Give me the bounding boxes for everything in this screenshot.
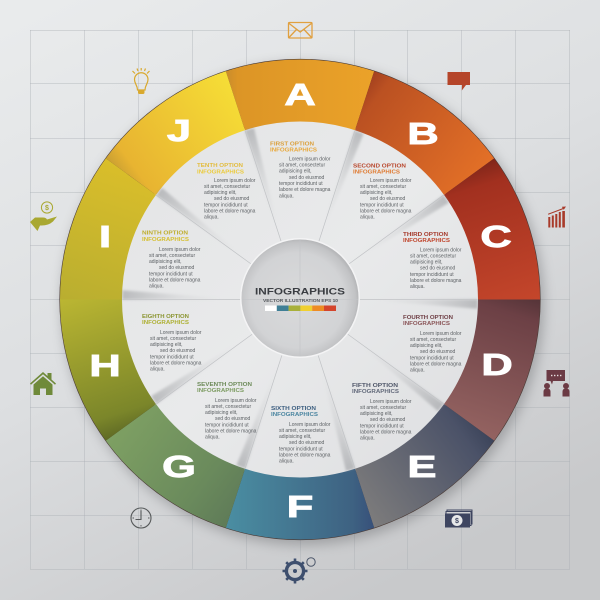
icon: speech bubble [448, 72, 470, 90]
text block: tenth option: Lorem ipsum dolor [214, 178, 256, 184]
text block: eighth option: adipisicing elit, [150, 342, 183, 348]
letter H: H [89, 348, 121, 383]
text block: eighth option: EIGHTH OPTION [142, 314, 189, 320]
text block: third option: aliqua. [410, 284, 425, 290]
text block: seventh option: labore et dolore magna [205, 429, 257, 435]
text block: sixth option: sed do eiusmod [289, 440, 325, 446]
text block: third option: Lorem ipsum dolor [420, 247, 462, 253]
text block: second option: tempor incididunt ut [360, 202, 404, 208]
text block: fifth option: adipisicing elit, [360, 411, 393, 417]
inner disc [120, 120, 480, 480]
text block: third option: tempor incididunt ut [410, 272, 454, 278]
title text: INFOGRAPHICS [255, 286, 346, 298]
text block: tenth option: aliqua. [204, 215, 219, 221]
segment J [99, 62, 260, 206]
text block: sixth option [271, 406, 331, 465]
text block: eighth option: INFOGRAPHICS [142, 320, 190, 326]
text block: seventh option [197, 382, 257, 441]
text block: tenth option: INFOGRAPHICS [197, 169, 245, 175]
text block: ninth option: tempor incididunt ut [149, 271, 193, 277]
segment H [49, 281, 162, 444]
text block: ninth option: INFOGRAPHICS [142, 237, 190, 243]
letter A: A [284, 77, 316, 112]
text block: third option: INFOGRAPHICS [403, 238, 451, 244]
text block: eighth option [142, 314, 202, 373]
text block: fourth option: tempor incididunt ut [410, 355, 454, 361]
text block: first option: tempor incididunt ut [279, 181, 323, 187]
letter G: G [162, 449, 196, 484]
icon: clock [131, 508, 151, 528]
segment I [49, 155, 162, 318]
text block: ninth option: sed do eiusmod [159, 265, 195, 271]
segment C [438, 155, 551, 318]
icon: light bulb [132, 68, 150, 94]
text block: fourth option: adipisicing elit, [410, 343, 443, 349]
segment D [438, 281, 551, 444]
text block: second option: INFOGRAPHICS [353, 170, 401, 176]
text block: fifth option [352, 383, 412, 442]
segment A [226, 60, 374, 130]
text block: eighth option: tempor incididunt ut [150, 354, 194, 360]
text block: ninth option: NINTH OPTION [142, 231, 188, 237]
icon: two people talking [544, 370, 570, 396]
text block: sixth option: tempor incididunt ut [279, 446, 323, 452]
text block: ninth option: Lorem ipsum dolor [159, 247, 201, 253]
text block: eighth option: sed do eiusmod [160, 348, 196, 354]
letter E: E [408, 449, 436, 484]
text block: eighth option: Lorem ipsum dolor [160, 330, 202, 336]
text block: seventh option: sit amet, consectetur [205, 404, 251, 410]
text block: third option [403, 232, 462, 290]
text block: sixth option: aliqua. [279, 459, 294, 465]
icon: envelope [288, 22, 312, 38]
text block: fourth option: aliqua. [410, 368, 425, 374]
icon: hand with coin: $ [45, 205, 49, 212]
text block: second option: adipisicing elit, [360, 190, 393, 196]
text block: second option: labore et dolore magna [360, 209, 412, 215]
text block: sixth option: labore et dolore magna [279, 453, 331, 459]
text block: ninth option: labore et dolore magna [149, 278, 201, 284]
text block: first option: INFOGRAPHICS [270, 148, 318, 154]
text block: fifth option: INFOGRAPHICS [352, 389, 400, 395]
text block: first option: sit amet, consectetur [279, 163, 325, 169]
letter F: F [287, 489, 313, 524]
text block: second option: sit amet, consectetur [360, 184, 406, 190]
text block: first option: labore et dolore magna [279, 187, 331, 193]
letter J: J [167, 113, 191, 148]
text block: eighth option: labore et dolore magna [150, 361, 202, 367]
text block: sixth option: SIXTH OPTION [271, 406, 316, 412]
text block: fourth option [403, 315, 462, 374]
text block: second option: sed do eiusmod [370, 196, 406, 202]
icon: hand with coin [30, 202, 57, 231]
text block: fifth option: aliqua. [360, 436, 375, 442]
text block: third option: THIRD OPTION [403, 232, 448, 238]
text block: seventh option: aliqua. [205, 435, 220, 441]
text block: ninth option [142, 231, 201, 290]
text block: second option: SECOND OPTION [353, 164, 406, 170]
text block: third option: sit amet, consectetur [410, 253, 456, 259]
text block: second option: aliqua. [360, 215, 375, 221]
segment letters [89, 77, 513, 524]
icon: bar chart with arrow [548, 206, 566, 228]
text block: fourth option: sit amet, consectetur [410, 337, 456, 343]
icon: banknotes [445, 510, 472, 528]
segment G [99, 393, 260, 537]
text block: third option: sed do eiusmod [420, 266, 456, 272]
center circle title [240, 238, 360, 358]
segment B [340, 62, 501, 206]
text block: second option [353, 164, 412, 221]
text block: fifth option: sit amet, consectetur [360, 405, 406, 411]
text block: seventh option: SEVENTH OPTION [197, 382, 252, 388]
segment E [340, 393, 501, 537]
text block: sixth option: adipisicing elit, [279, 434, 312, 440]
text block: first option: sed do eiusmod [289, 175, 325, 181]
text block: first option: Lorem ipsum dolor [289, 156, 331, 162]
text block: fourth option: INFOGRAPHICS [403, 321, 451, 327]
text block: tenth option: sed do eiusmod [214, 196, 250, 202]
icon: banknotes: $ [455, 518, 459, 525]
text block: first option [270, 142, 331, 199]
segment F [226, 469, 374, 539]
text block: fifth option: tempor incididunt ut [360, 423, 404, 429]
text block: fourth option: FOURTH OPTION [403, 315, 453, 321]
text block: tenth option [197, 163, 256, 221]
text block: fourth option: sed do eiusmod [420, 349, 456, 355]
text block: first option: FIRST OPTION [270, 142, 314, 148]
text block: first option: aliqua. [279, 193, 294, 199]
text block: tenth option: labore et dolore magna [204, 209, 256, 215]
text block: fifth option: sed do eiusmod [370, 417, 406, 423]
text block: seventh option: adipisicing elit, [205, 410, 238, 416]
text block: ninth option: aliqua. [149, 284, 164, 290]
text block: ninth option: sit amet, consectetur [149, 253, 195, 259]
wheel [49, 59, 551, 545]
text block: tenth option: TENTH OPTION [197, 163, 243, 169]
text block: seventh option: tempor incididunt ut [205, 422, 249, 428]
text block: fourth option: Lorem ipsum dolor [420, 331, 462, 337]
letter B: B [407, 116, 439, 151]
text block: sixth option: sit amet, consectetur [279, 428, 325, 434]
text block: fifth option: FIFTH OPTION [352, 383, 398, 389]
text block: sixth option: INFOGRAPHICS [271, 412, 319, 418]
letter C: C [480, 219, 512, 254]
text block: seventh option: INFOGRAPHICS [197, 388, 245, 394]
text block: tenth option: sit amet, consectetur [204, 184, 250, 190]
text block: seventh option: sed do eiusmod [215, 416, 251, 422]
text block: fifth option: Lorem ipsum dolor [370, 399, 412, 405]
text block: fourth option: labore et dolore magna [410, 362, 462, 368]
icon: house [30, 372, 56, 395]
text block: third option: labore et dolore magna [410, 278, 462, 284]
text block: seventh option: Lorem ipsum dolor [215, 398, 257, 404]
colour bar [265, 306, 336, 311]
text block: ninth option: adipisicing elit, [149, 259, 182, 265]
text block: first option: adipisicing elit, [279, 169, 312, 175]
text block: eighth option: sit amet, consectetur [150, 336, 196, 342]
text block: third option: adipisicing elit, [410, 260, 443, 266]
letter D: D [481, 347, 513, 382]
text block: sixth option: Lorem ipsum dolor [289, 422, 331, 428]
text block: second option: Lorem ipsum dolor [370, 178, 412, 184]
icon: gears [282, 558, 315, 584]
text block: tenth option: tempor incididunt ut [204, 202, 248, 208]
text block: tenth option: adipisicing elit, [204, 190, 237, 196]
text block: fifth option: labore et dolore magna [360, 430, 412, 436]
subtitle: VECTOR ILLUSTRATION EPS 10 [263, 298, 339, 303]
letter I: I [99, 219, 111, 254]
text block: eighth option: aliqua. [150, 367, 165, 373]
